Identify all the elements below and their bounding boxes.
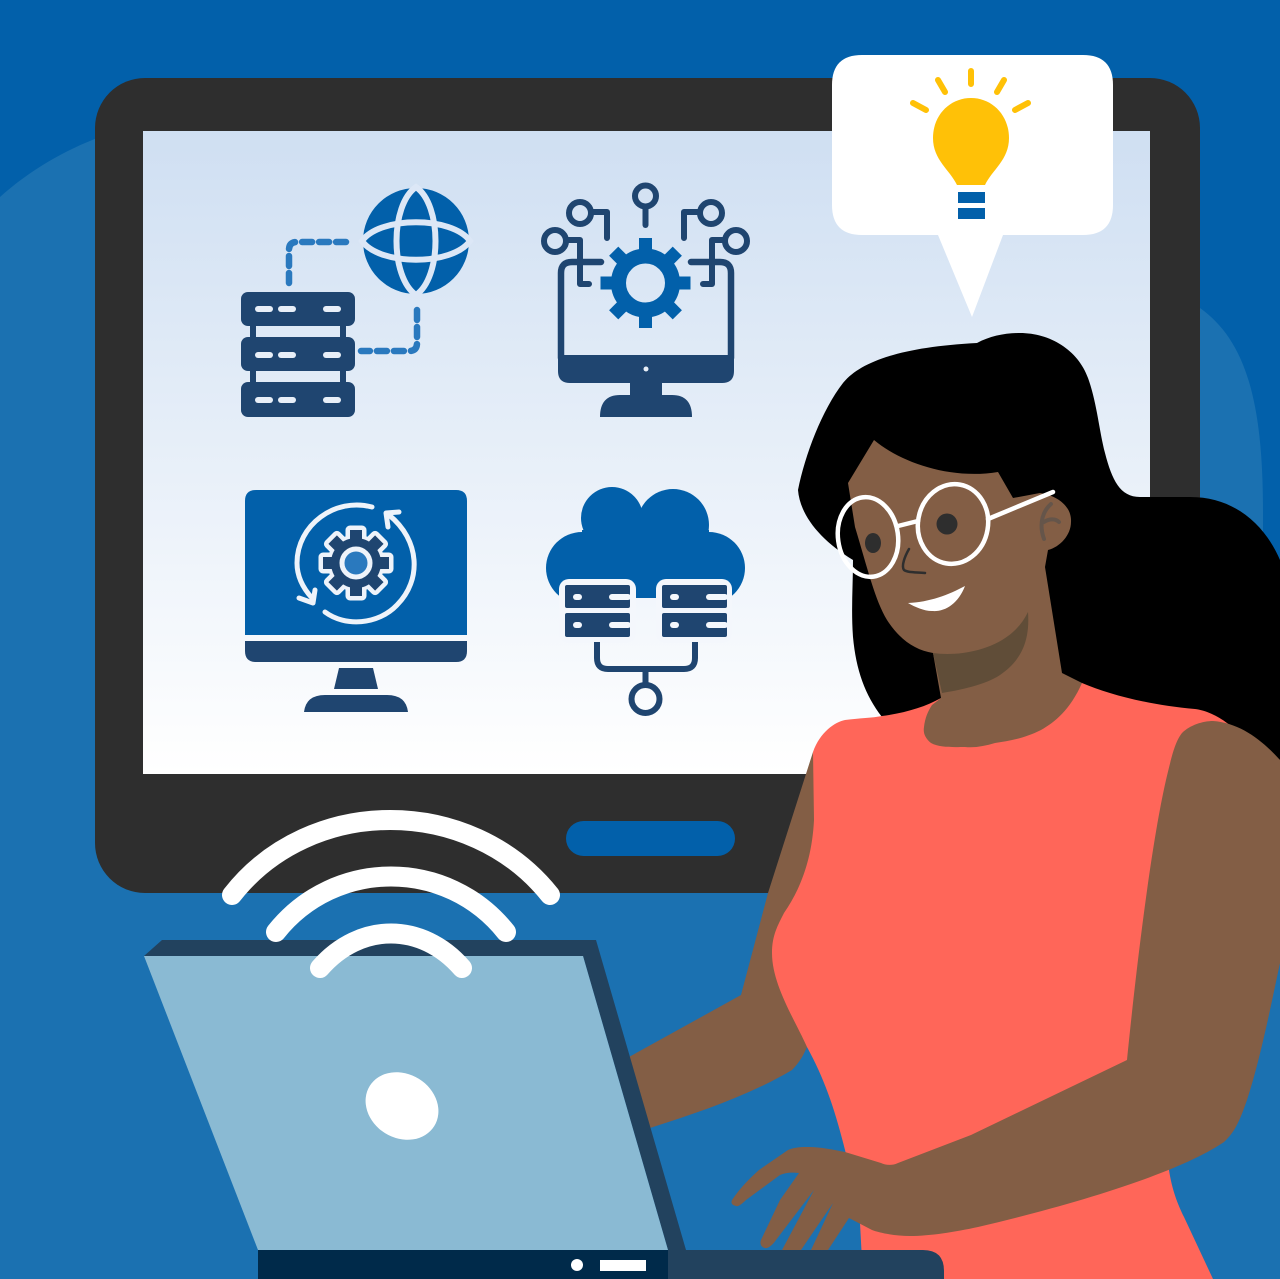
wifi inner arcs [276, 876, 506, 968]
left arm [629, 752, 840, 1128]
icon: monitor with gear and circuits [544, 186, 747, 417]
icon: server connected to globe [241, 187, 470, 417]
laptop [144, 940, 944, 1279]
speech bubble with light bulb [832, 55, 1113, 317]
right arm and hand [731, 721, 1280, 1250]
large display [95, 78, 1200, 893]
icon: monitor with rotating gear [245, 490, 467, 712]
eyes [865, 514, 958, 553]
smile [908, 586, 965, 611]
glasses [833, 479, 1053, 581]
outer wifi signal arc [232, 820, 550, 895]
hair [798, 333, 1280, 770]
icon: cloud with servers [546, 487, 745, 713]
face and neck [833, 440, 1082, 747]
nose [903, 549, 925, 573]
icon: light bulb [913, 71, 1028, 219]
torso: coral top [772, 683, 1280, 1279]
neck shadow [933, 612, 1028, 693]
ear detail [1042, 504, 1059, 539]
